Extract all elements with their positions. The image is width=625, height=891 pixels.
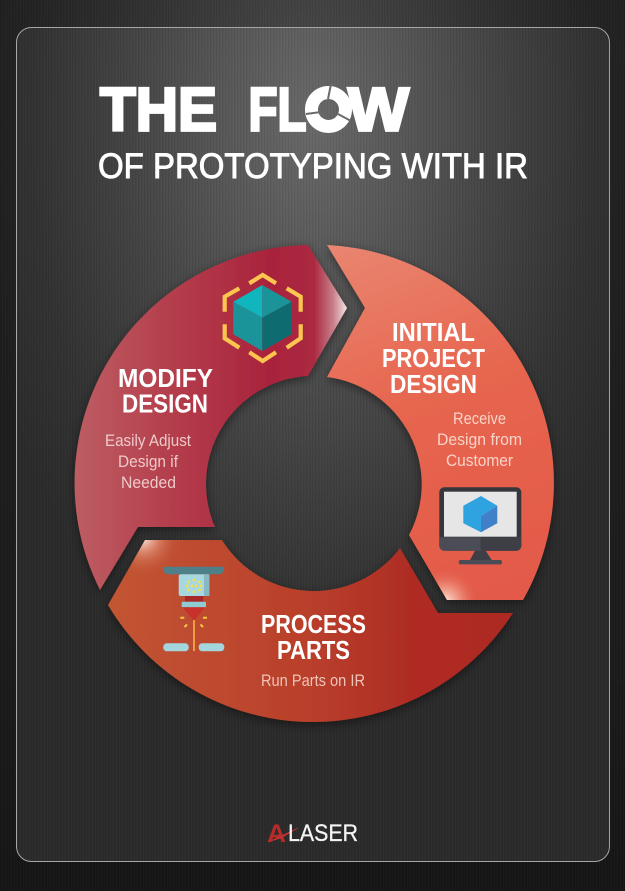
heading: process parts — [261, 609, 366, 665]
title line: THE FLOW — [100, 76, 409, 144]
icon: monitor with blue cube — [439, 487, 521, 564]
logo wordmark: LASER — [288, 820, 358, 847]
icon: laser cutting head — [163, 567, 224, 651]
description: initial project design: Customer — [446, 452, 513, 470]
description: modify design: Design if — [118, 453, 178, 471]
title line: THE FLOW: W — [348, 76, 409, 144]
heading: initial project design: INITIAL — [392, 317, 475, 347]
heading: process parts: PARTS — [277, 635, 350, 665]
heading: modify design: DESIGN — [122, 388, 208, 418]
heading: modify design — [118, 363, 213, 418]
panel: process parts segment — [108, 540, 513, 722]
title — [98, 76, 528, 186]
title line: THE FLOW: THE — [100, 76, 217, 144]
description: process parts: Run Parts on IR — [261, 672, 365, 690]
panel: initial project design segment — [327, 245, 554, 600]
logo: A-Laser — [267, 820, 358, 848]
heading: initial project design — [382, 317, 485, 399]
segment shape — [75, 245, 347, 590]
description: modify design: Easily Adjust — [105, 432, 191, 450]
logo swoosh — [268, 828, 298, 842]
heading: initial project design: DESIGN — [390, 369, 477, 399]
title line: THE FLOW: FL — [248, 76, 306, 144]
description: initial project design: Design from — [437, 431, 522, 449]
description: modify design: Needed — [121, 474, 176, 492]
segment shape — [327, 245, 554, 600]
description: modify design — [105, 432, 191, 492]
heading: modify design: MODIFY — [118, 363, 213, 393]
corner highlight — [108, 540, 222, 605]
icon: cycle ring in title — [306, 84, 351, 126]
subtitle: OF PROTOTYPING WITH IR — [98, 147, 528, 186]
heading: initial project design: PROJECT — [382, 343, 485, 373]
panel: modify design segment — [75, 245, 347, 590]
icon: teal cube with hexagon brackets — [225, 275, 301, 361]
description: initial project design — [437, 410, 522, 470]
logo mark: red A: A — [267, 820, 286, 848]
corner highlight — [409, 535, 540, 600]
segment shape — [108, 540, 513, 722]
heading: process parts: PROCESS — [261, 609, 366, 639]
description: initial project design: Receive — [453, 410, 506, 428]
